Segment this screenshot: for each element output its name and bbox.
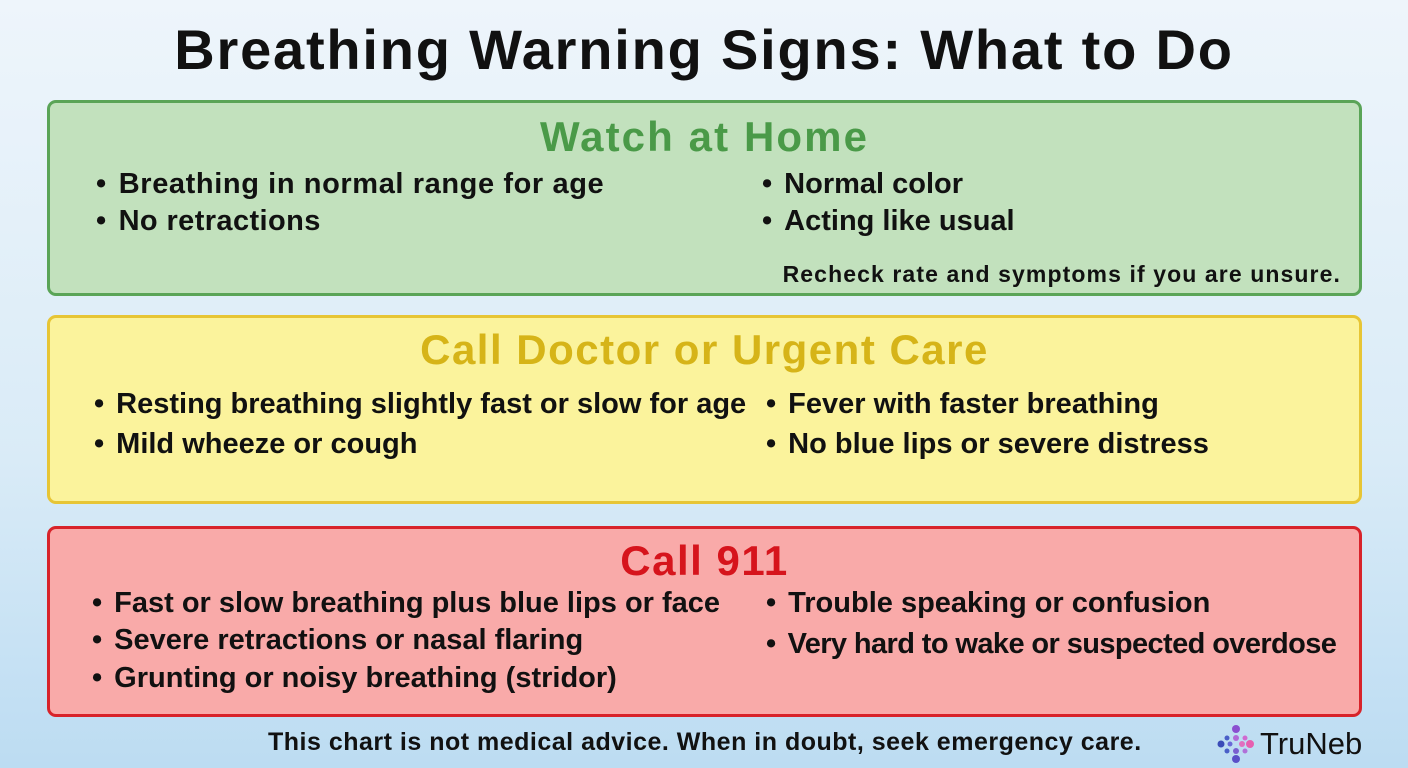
heading: call doctor: Call Doctor or Urgent Care — [420, 326, 989, 373]
bullet: Normal color — [784, 168, 963, 200]
bullet: Acting like usual — [784, 205, 1015, 237]
brand name: TruNeb — [1260, 726, 1362, 761]
title: Breathing Warning Signs: What to Do — [174, 18, 1234, 81]
heading: watch at home: Watch at Home — [540, 113, 869, 160]
bullet: Grunting or noisy breathing (stridor) — [114, 662, 617, 694]
note: Recheck rate and symptoms if you are unsure. — [783, 261, 1341, 287]
panel: call 911 — [47, 526, 1362, 717]
bullet: Breathing in normal range for age — [119, 168, 604, 200]
logo: TruNeb — [1218, 725, 1362, 763]
icon: dots — [1218, 725, 1254, 763]
heading: call 911: Call 911 — [620, 537, 789, 584]
panel: call doctor — [47, 315, 1362, 504]
footer disclaimer: This chart is not medical advice. When in doubt, seek emergency care. — [268, 728, 1142, 756]
bullet: Resting breathing slightly fast or slow for age — [116, 388, 746, 420]
bullet: No retractions — [119, 205, 321, 237]
bullet: No blue lips or severe distress — [788, 428, 1209, 460]
panel: watch at home — [47, 100, 1362, 296]
bullet: Trouble speaking or confusion — [788, 587, 1210, 619]
bullet: Fast or slow breathing plus blue lips or face — [114, 587, 720, 619]
bullet: Fever with faster breathing — [788, 388, 1159, 420]
bullet: Mild wheeze or cough — [116, 428, 417, 460]
bullet: Very hard to wake or suspected overdose — [788, 628, 1336, 660]
bullet: Severe retractions or nasal flaring — [114, 624, 583, 656]
